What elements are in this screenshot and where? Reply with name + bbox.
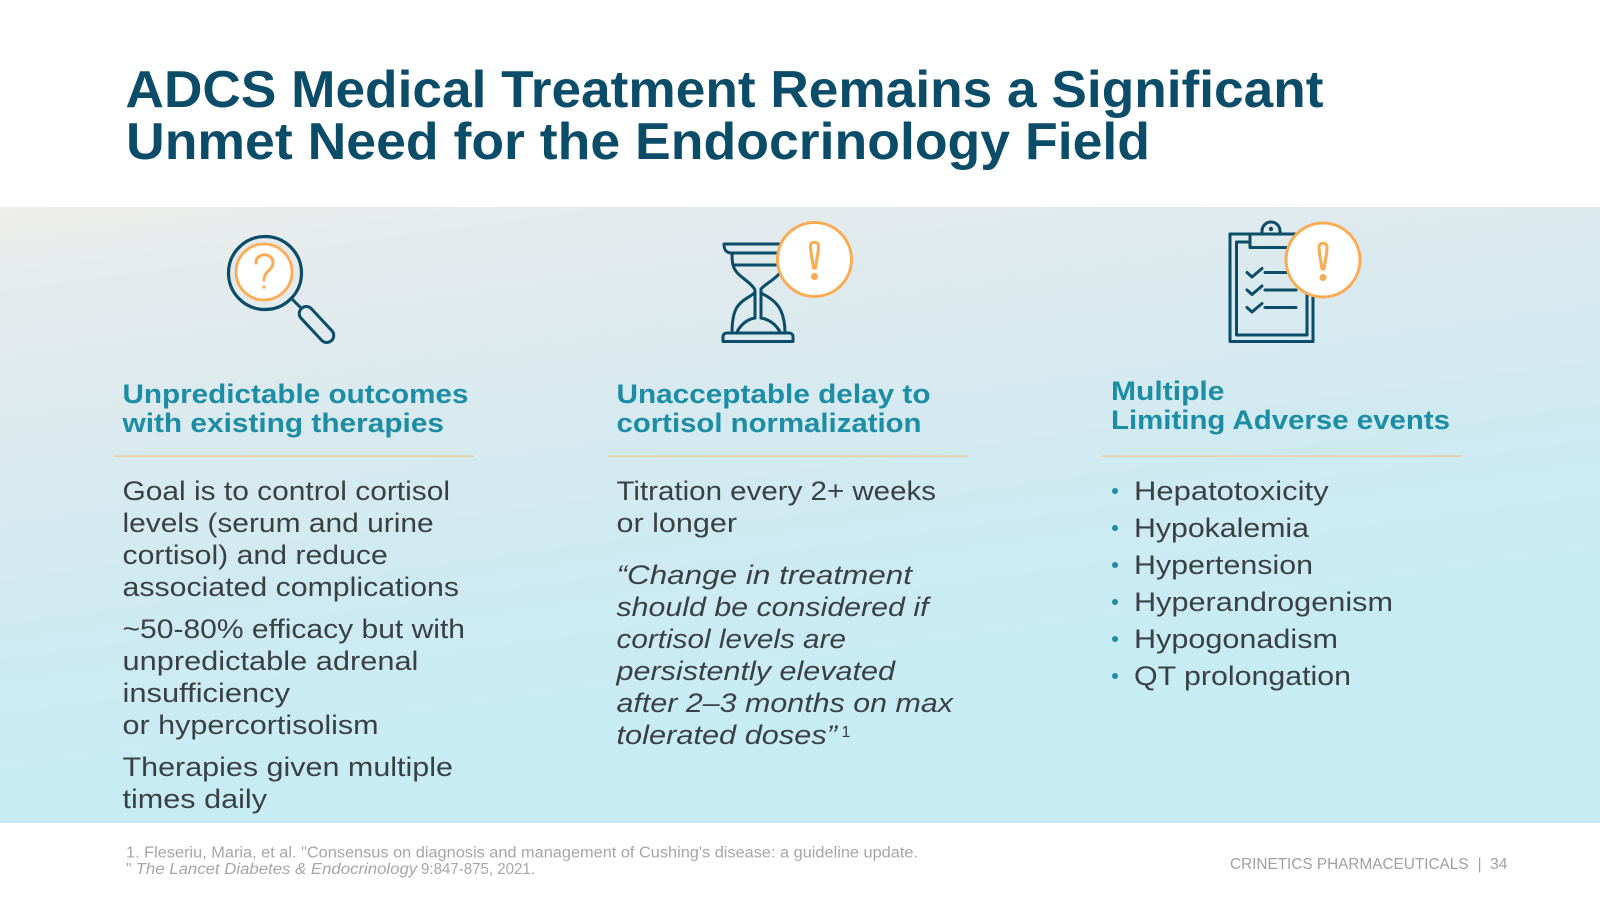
- text block: guideline quote: persistently elevated: [615, 656, 896, 686]
- panel: unacceptable delay: [608, 222, 968, 750]
- text block: titration: Titration every 2+ weeks: [616, 476, 936, 506]
- bullet list: adverse events: Hyperandrogenism: [1134, 587, 1393, 617]
- footnote: 9:847-875, 2021.: [421, 861, 535, 878]
- company name and page number: 34: [1490, 856, 1508, 873]
- text block: goal: Goal is to control cortisol: [122, 476, 450, 506]
- text block: goal: [122, 476, 459, 602]
- heading: unacceptable delay: Unacceptable delay to: [616, 379, 930, 409]
- icon: hourglass with alert: [723, 222, 852, 342]
- text block: efficacy: insufficiency: [122, 678, 291, 708]
- heading: unpredictable outcomes: with existing therapies: [121, 408, 444, 438]
- company name and page number: CRINETICS PHARMACEUTICALS: [1230, 856, 1468, 873]
- bullet list: adverse events: [1112, 476, 1393, 691]
- text block: guideline quote: after 2–3 months on max: [616, 688, 955, 718]
- text block: guideline quote: should be considered if: [616, 592, 931, 622]
- text block: guideline quote: “Change in treatment: [616, 560, 914, 590]
- panel: adverse events: [1102, 222, 1462, 691]
- title: [126, 61, 1323, 171]
- text block: titration: [616, 476, 936, 538]
- heading: adverse events: [1111, 376, 1450, 435]
- text block: guideline quote: tolerated doses”: [616, 720, 838, 750]
- footnote: 1. Fleseriu, Maria, et al. "Consensus on diagnosis and management of Cushing's disease: a guideline update.: [126, 844, 918, 862]
- text block: efficacy: ~50-80% efficacy but with: [122, 614, 465, 644]
- text block: guideline quote: 1: [842, 724, 850, 741]
- heading: adverse events: Limiting Adverse events: [1111, 405, 1450, 435]
- bullet list: adverse events: Hypogonadism: [1134, 624, 1338, 654]
- title: ADCS Medical Treatment Remains a Significant: [126, 61, 1323, 119]
- footnote: The Lancet Diabetes & Endocrinology: [136, 861, 419, 878]
- text block: efficacy: [122, 614, 465, 740]
- company name and page number: |: [1478, 856, 1482, 873]
- background band: [0, 207, 1600, 823]
- text block: dosing: times daily: [122, 784, 268, 814]
- text block: goal: associated complications: [122, 572, 459, 602]
- bullet list: adverse events: QT prolongation: [1134, 661, 1351, 691]
- bullet list: adverse events: Hypertension: [1134, 550, 1313, 580]
- text block: goal: levels (serum and urine: [122, 508, 434, 538]
- text block: guideline quote: cortisol levels are: [616, 624, 846, 654]
- bullet list: adverse events: Hypokalemia: [1134, 513, 1310, 543]
- icon: clipboard with alert: [1230, 222, 1360, 342]
- heading: unpredictable outcomes: Unpredictable outcomes: [122, 379, 468, 409]
- icon: magnifying glass with question mark: [228, 236, 337, 345]
- text block: dosing: Therapies given multiple: [122, 752, 453, 782]
- bullet list: adverse events: Hepatotoxicity: [1134, 476, 1329, 506]
- footnote: ": [126, 861, 132, 878]
- text block: goal: cortisol) and reduce: [122, 540, 388, 570]
- title: Unmet Need for the Endocrinology Field: [126, 113, 1150, 171]
- heading: unacceptable delay: [616, 379, 930, 438]
- text block: titration: or longer: [616, 508, 737, 538]
- heading: unpredictable outcomes: [121, 379, 469, 438]
- text block: efficacy: or hypercortisolism: [122, 710, 379, 740]
- heading: adverse events: Multiple: [1111, 376, 1224, 406]
- panel: unpredictable outcomes: [114, 236, 474, 814]
- text block: efficacy: unpredictable adrenal: [122, 646, 418, 676]
- footnote: [126, 844, 918, 878]
- text block: guideline quote: [615, 560, 955, 750]
- text block: dosing: [122, 752, 453, 814]
- heading: unacceptable delay: cortisol normalization: [616, 408, 922, 438]
